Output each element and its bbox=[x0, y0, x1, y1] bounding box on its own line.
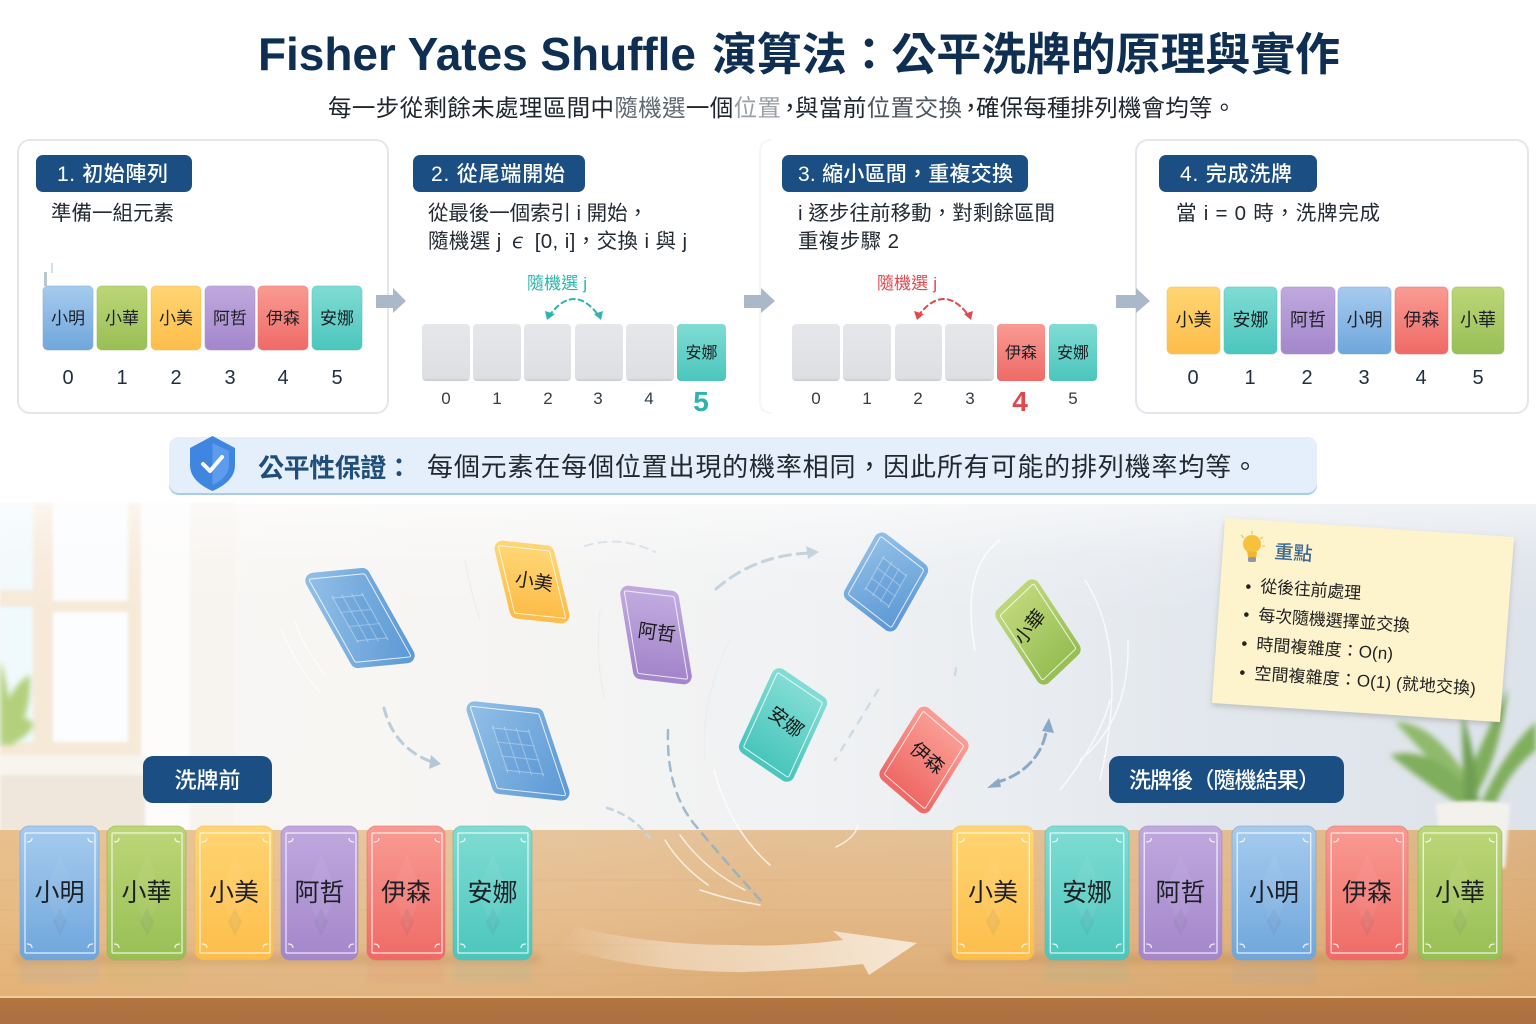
card 小明: 小明 bbox=[1249, 879, 1299, 907]
card 阿哲: 阿哲 bbox=[1155, 879, 1206, 907]
sweep arrow on table bbox=[560, 927, 917, 975]
card 小華 bbox=[1418, 826, 1502, 960]
flying card: green 小華 bbox=[1000, 584, 1076, 680]
subtitle: 每一步從剩餘未處理區間中隨機選一個位置 bbox=[328, 95, 781, 121]
step 2 indices: 1 bbox=[492, 389, 502, 408]
step 3 description bbox=[798, 202, 1055, 253]
note bullets: • bbox=[1239, 663, 1246, 682]
icon: light bulb bbox=[1241, 531, 1265, 562]
step 3 cards bbox=[792, 324, 1097, 381]
card 伊森: 伊森 bbox=[381, 879, 431, 907]
note bullets bbox=[1239, 577, 1477, 698]
flying card: yellow 小美: 小美 bbox=[513, 568, 554, 596]
flying card: blue back 2 bbox=[470, 706, 566, 796]
plant pot bbox=[1436, 801, 1510, 868]
step 2 indices: 0 bbox=[441, 389, 451, 408]
dashed motion arrow: right bbox=[987, 718, 1054, 788]
note title: 重點 bbox=[1274, 541, 1313, 566]
flying card: green 小華: 小華 bbox=[1010, 606, 1051, 649]
step 3 random label: 隨機選 j bbox=[877, 274, 937, 293]
flying card: yellow 小美 bbox=[498, 546, 566, 618]
card 小華 bbox=[107, 826, 186, 960]
title: Fisher Yates Shuffle bbox=[258, 28, 696, 80]
step 1 indices: 3 bbox=[224, 367, 236, 389]
right plant bbox=[1390, 688, 1536, 805]
step 4 indices: 0 bbox=[1187, 367, 1199, 389]
step 2 indices: 4 bbox=[644, 389, 654, 408]
step 3 description: i 逐步往前移動，對剩餘區間 bbox=[798, 202, 1055, 225]
step 4 cards: 小華 bbox=[1460, 310, 1496, 330]
flying card: red 伊森 bbox=[884, 711, 964, 809]
cards row: before shuffle bbox=[15, 826, 540, 983]
subtitle: 與當前位置交換 bbox=[795, 95, 962, 121]
step 1 indices: 1 bbox=[116, 367, 128, 389]
subtitle: ， bbox=[959, 95, 982, 121]
card 小華: 小華 bbox=[121, 879, 172, 907]
card 安娜: 安娜 bbox=[1062, 879, 1112, 907]
card 小美 bbox=[195, 826, 273, 960]
step 3 indices: 4 bbox=[1012, 386, 1028, 417]
note bullets: 每次隨機選擇並交換 bbox=[1258, 606, 1411, 636]
step 1 cards: 阿哲 bbox=[213, 309, 247, 328]
step 4 cards: 小明 bbox=[1346, 310, 1382, 330]
cards row: after shuffle bbox=[945, 826, 1515, 983]
left plant bbox=[0, 660, 34, 745]
arrow: step 1 to 2 bbox=[376, 288, 406, 313]
step 4 indices: 5 bbox=[1472, 367, 1484, 389]
step 2 swap arrow bbox=[545, 299, 603, 320]
card 安娜: 安娜 bbox=[467, 879, 518, 907]
step 2 description: 從最後一個索引 i 開始， bbox=[428, 202, 648, 225]
note bullets: 空間複雜度：O(1) (就地交換) bbox=[1254, 664, 1477, 698]
step 4 indices bbox=[1187, 367, 1484, 389]
title: 演算法：公平洗牌的原理與實作 bbox=[712, 29, 1340, 80]
panel: step 4 finished bbox=[1136, 140, 1528, 413]
step 2 heading: 2. 從尾端開始 bbox=[431, 163, 565, 186]
card 伊森: 伊森 bbox=[1342, 879, 1392, 907]
arrow: step 3 to 4 bbox=[1116, 288, 1150, 313]
note bullets: • bbox=[1245, 577, 1252, 596]
step 3 cards: 安娜 bbox=[1057, 344, 1089, 362]
dashed motion arrow: faint right bbox=[835, 668, 956, 760]
step 1 cards bbox=[43, 286, 362, 350]
title bbox=[258, 28, 1340, 80]
step 2 indices bbox=[441, 386, 709, 417]
banner heading: 公平性保證： bbox=[258, 453, 412, 483]
dashed motion arrow: small lower bbox=[607, 808, 650, 838]
step 2 cards: 安娜 bbox=[685, 344, 718, 362]
step 4 indices: 3 bbox=[1358, 367, 1370, 389]
step 1 indices: 0 bbox=[62, 367, 74, 389]
flying card: red 伊森: 伊森 bbox=[905, 738, 948, 779]
dashed motion arrow: long centre bbox=[668, 730, 762, 902]
card 小美: 小美 bbox=[968, 879, 1018, 907]
step 4 cards: 阿哲 bbox=[1290, 310, 1326, 330]
card 阿哲 bbox=[1139, 826, 1222, 960]
note bullets: • bbox=[1243, 605, 1250, 624]
step 1 indices bbox=[62, 367, 343, 389]
card 阿哲: 阿哲 bbox=[294, 879, 345, 907]
step 1 cards: 小華 bbox=[105, 309, 139, 328]
card 阿哲 bbox=[281, 826, 358, 960]
label: before shuffle bbox=[143, 756, 272, 803]
step 2 indices: 5 bbox=[693, 386, 709, 417]
arrow: step 2 to 3 bbox=[744, 288, 775, 313]
step 1 indices: 5 bbox=[331, 367, 343, 389]
motion swirl lines bbox=[282, 540, 1128, 905]
step 3 heading: 3. 縮小區間，重複交換 bbox=[798, 163, 1013, 186]
panel: step 2 start from tail bbox=[413, 155, 726, 417]
step 3 indices: 0 bbox=[811, 389, 821, 408]
card 小明: 小明 bbox=[34, 879, 85, 907]
step 3 description: 重複步驟 2 bbox=[798, 230, 899, 253]
card 小明 bbox=[20, 826, 99, 960]
panel: step 3 shrink range bbox=[760, 140, 1097, 417]
step 1 indices: 4 bbox=[277, 367, 289, 389]
flying card: teal 安娜 bbox=[743, 672, 823, 778]
card 安娜 bbox=[1045, 826, 1129, 960]
flying card: purple 阿哲: 阿哲 bbox=[636, 620, 677, 647]
banner text: 每個元素在每個位置出現的機率相同，因此所有可能的排列機率均等。 bbox=[427, 452, 1258, 482]
step 3 heading bbox=[782, 155, 1028, 192]
step 4 indices: 4 bbox=[1415, 367, 1427, 389]
step 1 heading: 1. 初始陣列 bbox=[57, 163, 168, 186]
subtitle: ， bbox=[778, 95, 802, 121]
step 2 description: 隨機選 j ∊ [0, i]，交換 i 與 j bbox=[428, 230, 687, 253]
card 小明 bbox=[1232, 826, 1316, 960]
step 4 heading bbox=[1159, 155, 1317, 192]
step 2 heading bbox=[413, 155, 585, 192]
dashed motion arrow: left bbox=[384, 708, 441, 769]
step 3 indices: 3 bbox=[965, 389, 975, 408]
card 小美: 小美 bbox=[209, 879, 259, 907]
step 1 heading bbox=[36, 155, 192, 192]
label: before shuffle: 洗牌前 bbox=[174, 768, 241, 793]
step 2 cards bbox=[422, 324, 726, 381]
step 4 heading: 4. 完成洗牌 bbox=[1180, 163, 1292, 186]
panel: step 1 initial array bbox=[18, 140, 388, 413]
wooden table bbox=[0, 830, 1536, 1024]
step 4 cards bbox=[1167, 287, 1504, 354]
step 1 cards: 小明 bbox=[51, 309, 85, 328]
step 2 random label: 隨機選 j bbox=[527, 274, 587, 293]
subtitle bbox=[328, 95, 1236, 121]
step 2 description bbox=[428, 202, 687, 253]
note bullets: • bbox=[1241, 634, 1248, 653]
note bullets: 從後往前處理 bbox=[1260, 577, 1362, 603]
card 小美 bbox=[952, 826, 1034, 960]
step 2 indices: 2 bbox=[543, 389, 553, 408]
icon: shield check bbox=[190, 436, 235, 491]
step 4 cards: 安娜 bbox=[1232, 310, 1268, 330]
step 4 indices: 1 bbox=[1244, 367, 1256, 389]
dashed motion arrow: top middle bbox=[585, 542, 819, 589]
step 1 indices: 2 bbox=[170, 367, 182, 389]
fairness banner bbox=[169, 436, 1317, 495]
step 4 description: 當 i = 0 時，洗牌完成 bbox=[1176, 202, 1380, 225]
step 3 swap arrow bbox=[914, 299, 973, 320]
step 1 cards: 伊森 bbox=[266, 309, 300, 328]
label: after shuffle bbox=[1109, 756, 1344, 803]
sticky note: key points bbox=[1213, 519, 1513, 721]
step 4 cards: 小美 bbox=[1176, 310, 1212, 330]
step 1 cards: 安娜 bbox=[320, 309, 354, 328]
step 3 indices: 2 bbox=[913, 389, 923, 408]
note bullets: 時間複雜度：O(n) bbox=[1256, 635, 1394, 664]
card 伊森 bbox=[1326, 826, 1408, 960]
step 4 cards: 伊森 bbox=[1404, 310, 1440, 330]
scene background bbox=[0, 504, 1536, 1024]
flying card: blue back 1 bbox=[309, 574, 411, 662]
card 伊森 bbox=[367, 826, 445, 960]
step 1 cards: 小美 bbox=[159, 309, 193, 328]
card 小華: 小華 bbox=[1435, 879, 1485, 907]
step 3 indices: 5 bbox=[1068, 389, 1078, 408]
step 2 indices: 3 bbox=[593, 389, 603, 408]
step 3 cards: 伊森 bbox=[1005, 344, 1037, 362]
step 1 description: 準備一組元素 bbox=[51, 202, 174, 225]
step 3 indices: 1 bbox=[862, 389, 872, 408]
subtitle: 確保每種排列機會均等。 bbox=[976, 95, 1236, 121]
card 安娜 bbox=[453, 826, 532, 960]
step 4 indices: 2 bbox=[1301, 367, 1313, 389]
flying card: purple 阿哲 bbox=[624, 591, 688, 679]
flying card: blue back 3 bbox=[848, 536, 924, 628]
step 3 indices bbox=[811, 386, 1078, 417]
label: after shuffle: 洗牌後（隨機結果） bbox=[1129, 768, 1320, 793]
flying card: teal 安娜: 安娜 bbox=[764, 702, 807, 742]
